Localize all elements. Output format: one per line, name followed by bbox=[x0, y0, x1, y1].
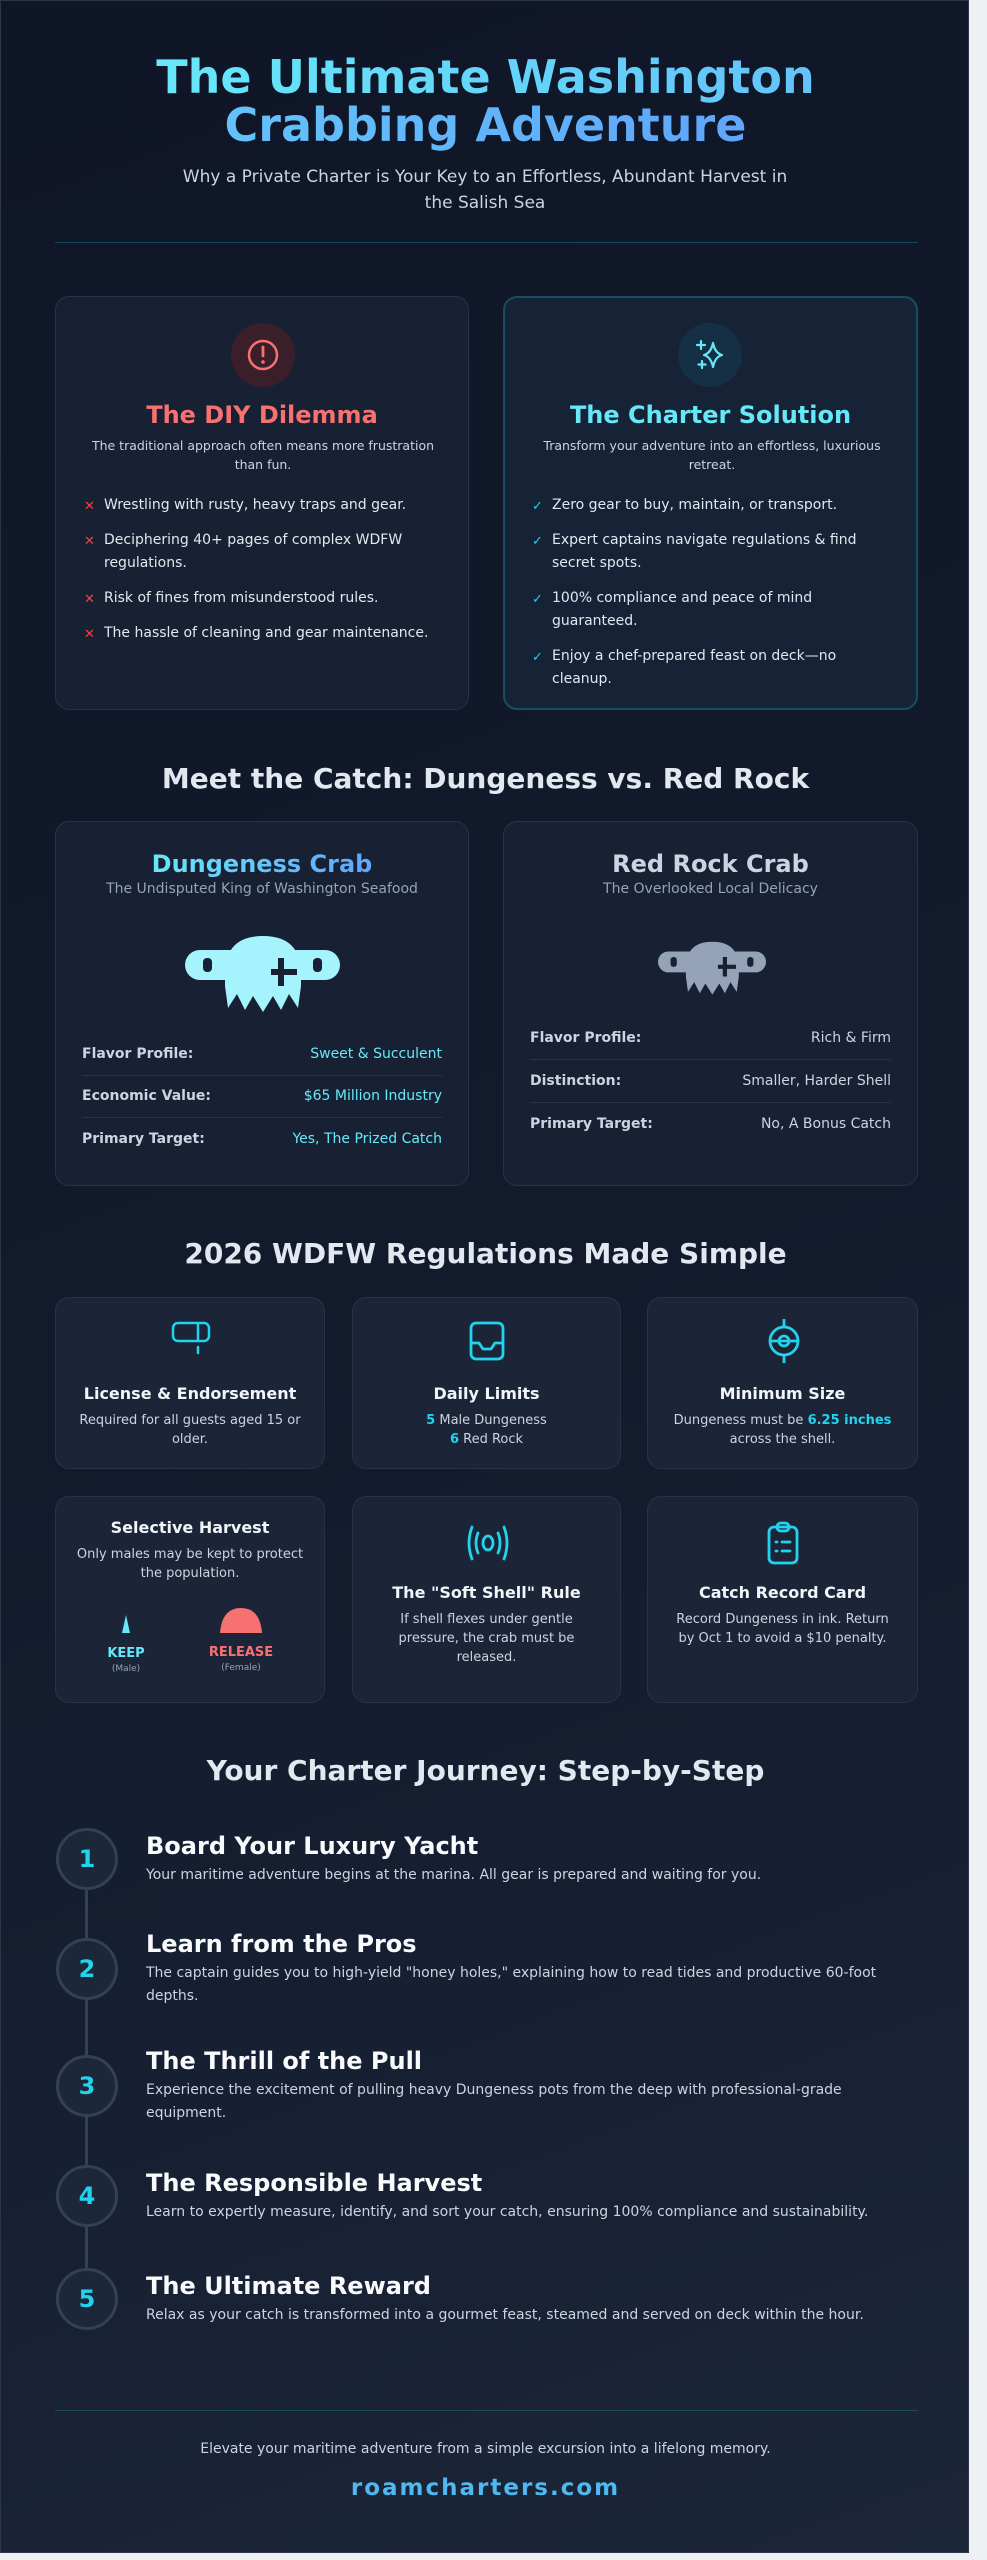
row: primary target: No, A Bonus Catch bbox=[761, 1116, 891, 1132]
panel: dungeness crab bbox=[55, 821, 469, 1186]
icon: keep male: KEEP bbox=[107, 1646, 145, 1661]
icon: alert bbox=[231, 323, 295, 387]
timeline connector bbox=[85, 1881, 88, 2281]
step 2: 2 bbox=[79, 1955, 95, 1983]
step 2: The captain guides you to high-yield "honey holes," explaining how to read tides and productive 60-foot depths. bbox=[146, 1965, 876, 2004]
step 1: 1 bbox=[79, 1845, 95, 1873]
icon: release female bbox=[209, 1608, 273, 1673]
icon: crab bbox=[658, 942, 766, 994]
row: distinction: Smaller, Harder Shell bbox=[742, 1073, 891, 1089]
row: economic value: Economic Value: bbox=[82, 1088, 211, 1104]
step 1: Your maritime adventure begins at the marina. All gear is prepared and waiting for you. bbox=[146, 1867, 761, 1883]
icon: crab bbox=[185, 936, 340, 1012]
step 5 bbox=[56, 2268, 864, 2330]
list: benefits: Enjoy a chef-prepared feast on deck—no cleanup. bbox=[552, 648, 836, 687]
row: flavor: Flavor Profile: bbox=[82, 1046, 193, 1062]
list: problems: Deciphering 40+ pages of complex WDFW regulations. bbox=[104, 532, 402, 571]
panel: catch record: Record Dungeness in ink. Return by Oct 1 to avoid a $10 penalty. bbox=[676, 1612, 889, 1646]
list: benefits bbox=[532, 497, 857, 687]
row: primary target bbox=[82, 1131, 442, 1147]
title: The Ultimate Washington bbox=[156, 50, 815, 104]
list: problems: ✕ bbox=[84, 592, 95, 607]
step 1: Board Your Luxury Yacht bbox=[146, 1832, 478, 1860]
step 4: The Responsible Harvest bbox=[146, 2169, 482, 2197]
step 5: 5 bbox=[79, 2285, 95, 2313]
panel: selective harvest: Selective Harvest bbox=[111, 1518, 269, 1537]
subtitle bbox=[183, 167, 787, 213]
step 2: Learn from the Pros bbox=[146, 1930, 417, 1958]
step 4 bbox=[56, 2165, 868, 2227]
panel: daily limits: Daily Limits bbox=[433, 1384, 540, 1403]
step 4: 4 bbox=[79, 2182, 95, 2210]
panel: license: Required for all guests aged 15 or older. bbox=[79, 1413, 301, 1447]
row: primary target: Yes, The Prized Catch bbox=[292, 1131, 442, 1147]
panel: daily limits: 5 Male Dungeness bbox=[426, 1413, 547, 1428]
icon: keep male bbox=[107, 1615, 145, 1674]
icon: license bbox=[172, 1322, 210, 1354]
heading: The DIY Dilemma bbox=[146, 401, 378, 429]
row: distinction: Distinction: bbox=[530, 1073, 621, 1089]
row: flavor: Sweet & Succulent bbox=[310, 1046, 442, 1062]
heading: regulations: 2026 WDFW Regulations Made Simple bbox=[184, 1237, 787, 1270]
list: benefits: ✓ bbox=[532, 499, 543, 514]
list: problems: ✕ bbox=[84, 499, 95, 514]
list: benefits: Zero gear to buy, maintain, or transport. bbox=[552, 497, 837, 513]
panel: minimum size: Dungeness must be 6.25 inches across the shell. bbox=[674, 1413, 891, 1447]
step 3: The Thrill of the Pull bbox=[146, 2047, 422, 2075]
icon: release female: (Female) bbox=[221, 1663, 261, 1673]
panel: selective harvest: Only males may be kept to protect the population. bbox=[77, 1547, 303, 1581]
row: flavor bbox=[530, 1030, 891, 1046]
icon: target bbox=[768, 1319, 800, 1363]
row: economic value bbox=[82, 1088, 442, 1104]
step 3: Experience the excitement of pulling heavy Dungeness pots from the deep with professional-grade equipment. bbox=[146, 2082, 842, 2121]
list: problems: Wrestling with rusty, heavy traps and gear. bbox=[104, 497, 406, 513]
row: primary target: Primary Target: bbox=[530, 1116, 653, 1132]
row: flavor: Rich & Firm bbox=[811, 1030, 891, 1046]
card title: Red Rock Crab bbox=[612, 850, 809, 878]
step 5: The Ultimate Reward bbox=[146, 2272, 431, 2300]
list: benefits: 100% compliance and peace of mind guaranteed. bbox=[552, 590, 812, 629]
panel: selective harvest bbox=[55, 1496, 325, 1703]
list: benefits: ✓ bbox=[532, 592, 543, 607]
panel: DIY dilemma bbox=[55, 296, 469, 710]
panel: catch record bbox=[647, 1496, 918, 1703]
list: problems: The hassle of cleaning and gear maintenance. bbox=[104, 625, 428, 641]
panel: license bbox=[55, 1297, 325, 1469]
step 5: Relax as your catch is transformed into a gourmet feast, steamed and served on deck within the hour. bbox=[146, 2307, 864, 2323]
list: benefits: ✓ bbox=[532, 650, 543, 665]
row: flavor: Flavor Profile: bbox=[530, 1030, 641, 1046]
panel: minimum size: Minimum Size bbox=[720, 1384, 845, 1403]
panel: red rock crab bbox=[503, 821, 918, 1186]
panel: minimum size bbox=[647, 1297, 918, 1469]
description: The traditional approach often means more frustration than fun. bbox=[92, 438, 434, 472]
panel: soft shell bbox=[352, 1496, 621, 1703]
subtitle: the Salish Sea bbox=[425, 193, 545, 213]
subtitle: The Overlooked Local Delicacy bbox=[603, 881, 818, 897]
step 2 bbox=[56, 1930, 876, 2004]
card title: Dungeness Crab bbox=[152, 850, 372, 878]
row: economic value: $65 Million Industry bbox=[304, 1088, 442, 1104]
icon: release female: RELEASE bbox=[209, 1645, 273, 1660]
panel: license: License & Endorsement bbox=[84, 1384, 296, 1403]
list: problems bbox=[84, 497, 428, 642]
subtitle: The Undisputed King of Washington Seafood bbox=[106, 881, 418, 897]
title bbox=[156, 50, 815, 152]
step 3 bbox=[56, 2047, 842, 2121]
step 4: Learn to expertly measure, identify, and sort your catch, ensuring 100% compliance and sustainability. bbox=[146, 2204, 868, 2220]
description: Transform your adventure into an effortless, luxurious retreat. bbox=[543, 438, 881, 472]
panel: catch record: Catch Record Card bbox=[699, 1583, 866, 1602]
subtitle: Why a Private Charter is Your Key to an Effortless, Abundant Harvest in bbox=[183, 167, 787, 187]
panel: daily limits bbox=[352, 1297, 621, 1469]
heading: meet the catch: Meet the Catch: Dungeness vs. Red Rock bbox=[162, 762, 809, 795]
list: problems: ✕ bbox=[84, 534, 95, 549]
icon: broadcast bbox=[468, 1526, 508, 1560]
list: benefits: Expert captains navigate regulations & find secret spots. bbox=[552, 532, 857, 571]
row: flavor bbox=[82, 1046, 442, 1062]
title: Crabbing Adventure bbox=[225, 98, 746, 152]
list: benefits: ✓ bbox=[532, 534, 543, 549]
step 3: 3 bbox=[79, 2072, 95, 2100]
footer url: roamcharters.com bbox=[351, 2475, 620, 2501]
row: primary target: Primary Target: bbox=[82, 1131, 205, 1147]
panel: charter solution bbox=[503, 296, 918, 710]
row: primary target bbox=[530, 1116, 891, 1132]
icon: sparkles bbox=[678, 323, 742, 387]
icon: tray bbox=[470, 1322, 504, 1360]
heading: charter journey: Your Charter Journey: Step-by-Step bbox=[207, 1754, 764, 1787]
panel: daily limits: 6 Red Rock bbox=[450, 1432, 523, 1447]
row: distinction bbox=[530, 1073, 891, 1089]
footer tagline: Elevate your maritime adventure from a simple excursion into a lifelong memory. bbox=[200, 2441, 771, 2457]
icon: clipboard bbox=[768, 1522, 798, 1564]
panel: soft shell: If shell flexes under gentle pressure, the crab must be released. bbox=[399, 1612, 574, 1665]
step 1 bbox=[56, 1828, 761, 1890]
panel: soft shell: The "Soft Shell" Rule bbox=[392, 1583, 581, 1602]
icon: keep male: (Male) bbox=[112, 1664, 140, 1674]
list: problems: ✕ bbox=[84, 627, 95, 642]
list: problems: Risk of fines from misunderstood rules. bbox=[104, 590, 378, 606]
heading: The Charter Solution bbox=[570, 401, 851, 429]
